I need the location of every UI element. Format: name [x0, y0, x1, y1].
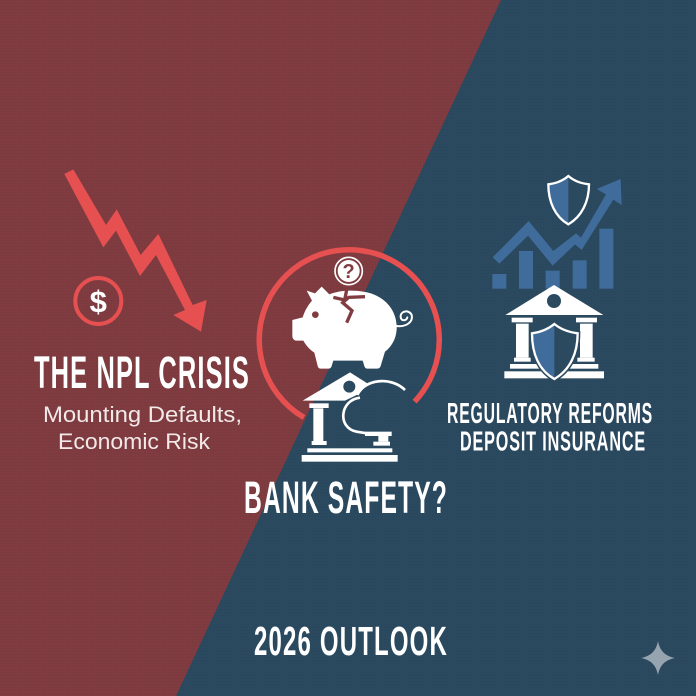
icon: dollar coin: $	[90, 284, 107, 319]
text block: mounting defaults, economic risk	[43, 402, 242, 454]
footer: 2026 outlook: 2026 OUTLOOK	[254, 618, 448, 664]
icon: question mark badge: ?	[343, 261, 355, 283]
icon: bank with shield	[504, 285, 604, 379]
icon: bank with cloud outline	[302, 372, 405, 462]
text block: mounting defaults, economic risk: Economic Risk	[58, 429, 211, 454]
icon: shield above chart	[548, 176, 589, 224]
heading: bank safety: BANK SAFETY?	[244, 472, 448, 523]
icon: cracked piggy bank	[292, 257, 412, 369]
icon: shield on bank	[532, 324, 578, 379]
text block: mounting defaults, economic risk: Mounting Defaults,	[43, 402, 242, 427]
text block: regulatory reforms, deposit insurance	[447, 398, 653, 456]
icon: dollar coin	[75, 278, 121, 324]
panel: red crisis background	[0, 0, 501, 696]
icon: crack in piggy bank	[333, 290, 365, 323]
icon: red ring around piggy bank	[259, 250, 439, 418]
icon: rising chart with bars and arrow	[492, 179, 622, 289]
icon: sparkle	[641, 641, 675, 675]
title: the NPL crisis: THE NPL CRISIS	[34, 347, 250, 398]
icon: falling red arrow	[64, 169, 207, 332]
